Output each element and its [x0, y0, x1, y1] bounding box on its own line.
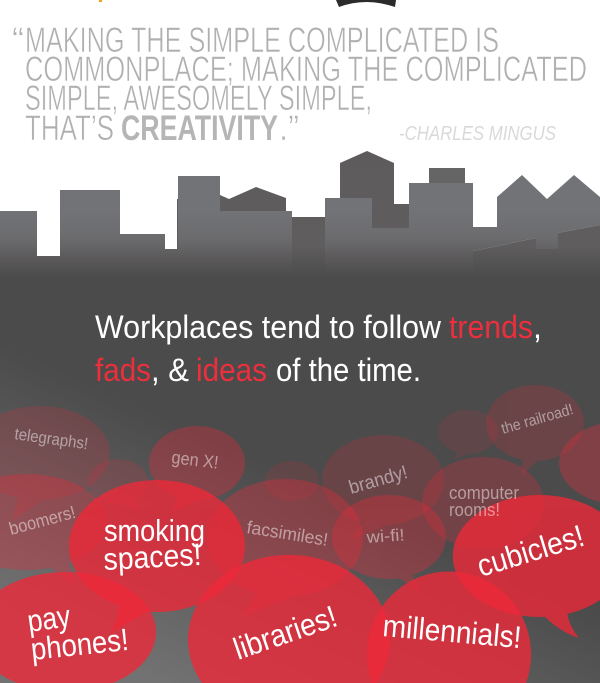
heading: trends	[449, 309, 533, 345]
quote: SIMPLE, AWESOMELY SIMPLE,	[25, 79, 372, 118]
heading: Workplaces tend to follow	[95, 309, 442, 345]
quote: CREATIVITY	[121, 109, 278, 148]
speech bubble: facsimiles: facsimiles!	[245, 517, 329, 550]
speech bubble: brandy	[322, 435, 444, 540]
heading: , &	[151, 352, 189, 388]
speech bubble: libraries: libraries!	[229, 599, 341, 667]
speech bubble: gen X: gen X!	[171, 447, 220, 473]
speech bubble: pay phones: pay	[25, 598, 73, 639]
quote	[12, 21, 587, 148]
speech bubble: millennials: millennials!	[381, 608, 523, 655]
quote attribution: -CHARLES MINGUS	[399, 123, 557, 145]
speech bubble: gen X	[149, 426, 245, 512]
speech bubble: the railroad: the railroad!	[499, 401, 575, 438]
speech bubble: brandy: brandy!	[347, 462, 410, 499]
speech bubble: computer rooms: rooms!	[449, 500, 500, 520]
speech bubble: telegraphs: telegraphs!	[13, 425, 89, 453]
quote: .”	[279, 109, 299, 148]
speech bubble: smoking spaces: spaces!	[103, 537, 202, 577]
speech bubble: cubicles	[453, 495, 600, 638]
speech bubble: libraries	[188, 555, 390, 683]
speech bubble: telegraphs	[0, 406, 110, 521]
speech bubble: millennials	[367, 571, 531, 683]
speech bubble: smoking spaces: smoking	[104, 513, 205, 548]
heading: ideas	[196, 352, 267, 388]
speech bubble: wi-fi	[332, 495, 446, 593]
quote: “	[12, 21, 24, 60]
icon: cropped black arc	[336, 0, 396, 7]
speech bubble: facsimiles	[207, 479, 363, 617]
speech bubble: cubicles: cubicles!	[473, 518, 588, 584]
speech bubble: the railroad	[486, 385, 584, 476]
speech bubble: boomers: boomers!	[7, 502, 78, 539]
skyline	[0, 151, 600, 278]
speech bubble: pay phones	[0, 572, 156, 683]
speech bubble: wi-fi: wi-fi!	[365, 525, 405, 547]
speech bubble: small blank right	[438, 410, 498, 460]
heading: of the time.	[276, 352, 421, 388]
heading	[95, 309, 542, 388]
speech bubble: boomers	[0, 474, 107, 585]
icon: cropped orange mark	[99, 0, 102, 2]
dark background	[0, 276, 600, 683]
speech bubble: computer rooms: computer	[449, 483, 519, 503]
speech bubble: smoking spaces	[69, 480, 245, 633]
speech bubble: small blank centre	[265, 461, 319, 501]
speech bubble: pay phones: phones!	[29, 622, 130, 667]
speech bubble: computer rooms	[422, 457, 544, 549]
heading: fads	[95, 352, 151, 388]
heading: ,	[533, 309, 542, 345]
speech bubble: small blank left	[88, 459, 148, 512]
quote: THAT’S	[25, 109, 114, 148]
speech bubble: partly cropped right	[559, 424, 600, 502]
